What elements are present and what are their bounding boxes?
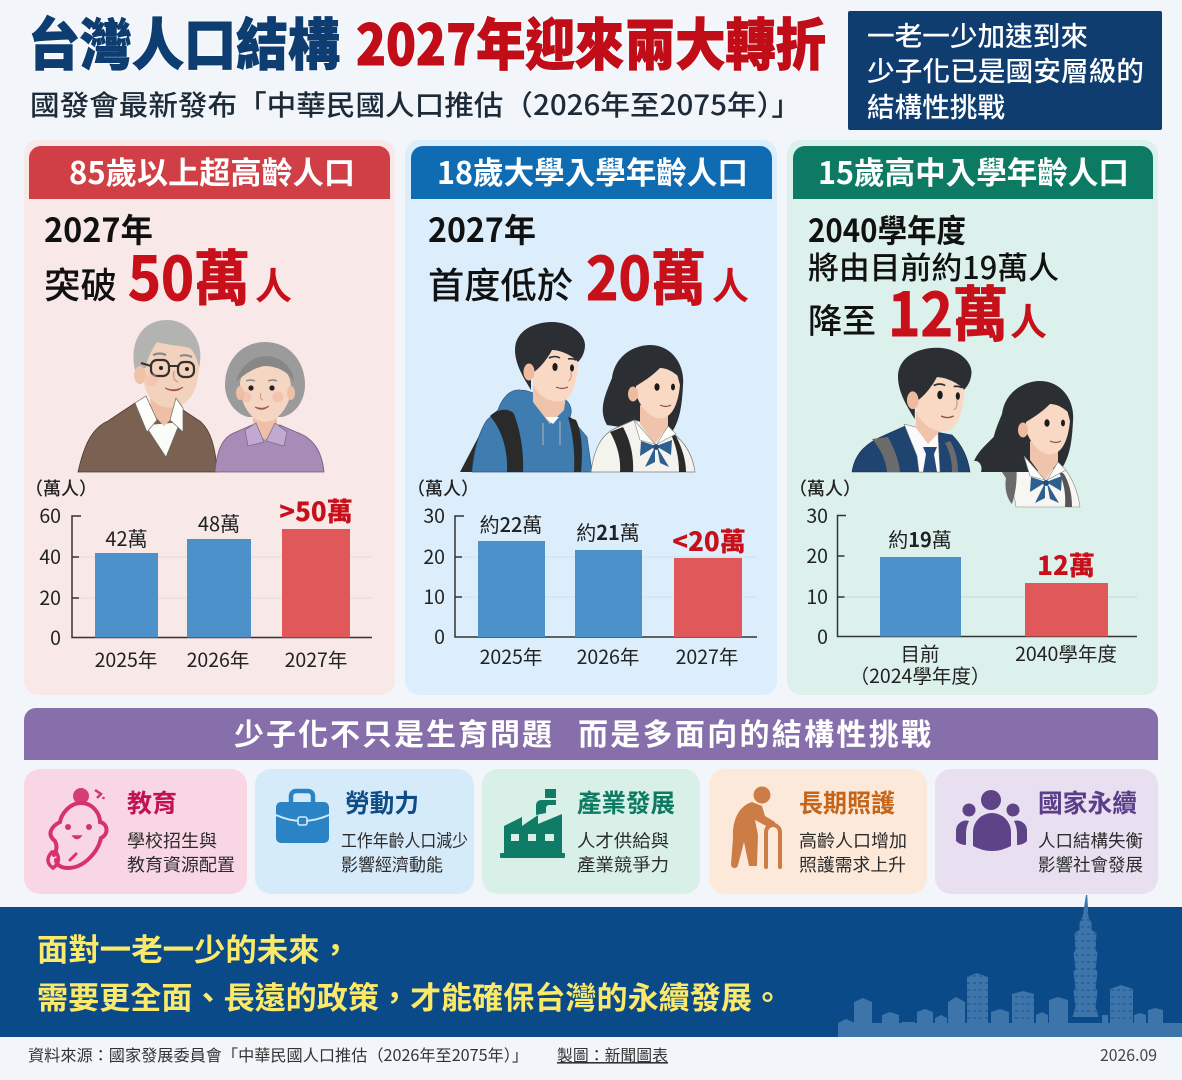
card: 長期照護: [709, 769, 927, 894]
bar chart: 15-year-olds: 12萬: [1037, 546, 1095, 583]
card: 教育: 學校招生與: [127, 828, 217, 853]
card: 國家永續: [935, 769, 1158, 894]
footer date: 2026.09: [1100, 1042, 1157, 1066]
card: 教育: 教育: [127, 784, 177, 820]
bar chart: 85+: [25, 475, 372, 673]
bar chart: 18-year-olds: 10: [423, 581, 445, 610]
headline: 2027年: [44, 204, 153, 252]
bar chart: 15-year-olds: 目前: [900, 638, 940, 667]
bar chart: 18-year-olds: [407, 475, 757, 670]
title: 2027年迎來: [356, 1, 624, 82]
title: 兩大轉折: [625, 1, 826, 82]
callout: top right: 結構性挑戰: [867, 86, 1005, 125]
bar chart: 85+: 40: [39, 541, 61, 570]
headline: [44, 204, 292, 318]
headline: 首度低於: [428, 257, 573, 309]
card: 國家永續: 人口結構失衡: [1038, 828, 1143, 853]
illustration: elderly couple: [78, 320, 324, 472]
panel header: [29, 146, 390, 199]
bar chart: 85+: 2025年: [95, 644, 157, 673]
headline: 2040學年度: [808, 206, 966, 252]
bar chart: 18-year-olds: 2025年: [480, 641, 542, 670]
card: 勞動力: [255, 769, 474, 894]
bar chart: 18-year-olds: 0: [434, 621, 445, 650]
bar chart: 18-year-olds: <20萬: [672, 522, 746, 559]
illustration: high school students: [852, 348, 1080, 507]
banner: 多面向的結構性挑戰: 少子化不只是生育問題: [234, 710, 552, 754]
callout: top right: [848, 11, 1162, 130]
headline: 20萬: [586, 231, 706, 318]
headline: 將由目前約19萬人: [808, 243, 1059, 288]
card: 勞動力: 影響經濟動能: [341, 852, 443, 877]
bar chart: 15-year-olds: （萬人）: [789, 475, 861, 501]
card: 國家永續: 影響社會發展: [1038, 852, 1143, 877]
card: 產業發展: [482, 769, 700, 894]
callout: top right: 一老一少加速到來: [867, 15, 1088, 54]
card: 產業發展: 產業發展: [577, 784, 675, 820]
icon: Taipei skyline: [838, 895, 1182, 1037]
headline: 人: [255, 256, 292, 310]
bar chart: 85+: 2026年: [187, 644, 249, 673]
card: 產業發展: 產業競爭力: [577, 852, 669, 877]
card: 長期照護: 長期照護: [799, 784, 895, 820]
bar chart: 15-year-olds: 約19萬: [888, 524, 952, 553]
bar chart: 18-year-olds: （萬人）: [407, 475, 479, 501]
headline: 人: [712, 256, 749, 310]
footer source: 資料來源：國家發展委員會「中華民國人口推估（2026年至2075年）」: [28, 1042, 528, 1066]
banner: 多面向的結構性挑戰: 而是多面向的結構性挑戰: [578, 710, 931, 754]
icon: factory: [500, 789, 565, 858]
bar chart: 85+: （萬人）: [25, 475, 97, 501]
closing band: 需要更全面、長遠的政策，才能確保台灣的永續發展。: [37, 973, 783, 1018]
bar chart: 15-year-olds: 20: [806, 540, 828, 569]
bar chart: 15-year-olds: 30: [806, 500, 828, 529]
bar chart: 18-year-olds: 約21萬: [576, 517, 640, 546]
bar chart: 18-year-olds: 約22萬: [480, 509, 542, 538]
callout: top right: 少子化已是國安層級的: [867, 50, 1144, 89]
headline: 突破: [44, 257, 117, 309]
headline: 12萬: [888, 267, 1008, 354]
card: 國家永續: 國家永續: [1038, 784, 1137, 820]
panel header: 85歲以上超高齡人口: [69, 148, 355, 193]
panel header: 18歲大學入學年齡人口: [437, 148, 748, 193]
bar chart: 85+: 20: [39, 582, 61, 611]
headline: [428, 204, 749, 318]
bar chart: 85+: 0: [50, 622, 61, 651]
title: [28, 1, 826, 82]
headline: 50萬: [128, 231, 250, 318]
bar chart: 15-year-olds: 0: [817, 621, 828, 650]
bar chart: 85+: 42萬: [105, 523, 148, 552]
bar chart: 85+: 60: [39, 500, 61, 529]
bar chart: 15-year-olds: 2040學年度: [1015, 638, 1117, 667]
panel: 18歲大學入學年齡人口: [405, 140, 777, 695]
card: 教育: 教育資源配置: [127, 852, 235, 877]
panel: 15歲高中入學年齡人口: [787, 140, 1158, 695]
headline: [808, 206, 1059, 354]
card: 產業發展: 人才供給與: [577, 828, 669, 853]
panel: 85歲以上超高齡人口: [24, 140, 395, 695]
card: 教育: [24, 769, 247, 894]
card: 長期照護: 高齡人口增加: [799, 828, 907, 853]
icon: briefcase: [276, 791, 329, 843]
closing band: [0, 895, 1182, 1037]
card: 勞動力: 工作年齡人口減少: [341, 828, 468, 853]
bar chart: 18-year-olds: 30: [423, 500, 445, 529]
icon: people: [956, 790, 1027, 851]
headline: 2027年: [428, 204, 536, 252]
illustration: university students: [460, 322, 695, 472]
subtitle: 國發會最新發布「中華民國人口推估（2026年至2075年）」: [30, 84, 801, 124]
card: 勞動力: 勞動力: [345, 784, 419, 820]
icon: elder with cane: [731, 786, 780, 868]
bar chart: 18-year-olds: 20: [423, 541, 445, 570]
title: 台灣人口結構: [28, 1, 340, 82]
bar chart: 15-year-olds: 10: [806, 581, 828, 610]
closing band: 面對一老一少的未來，: [37, 925, 351, 970]
headline: 人: [1010, 292, 1047, 346]
footer credit: 製圖：新聞圖表: [557, 1042, 668, 1066]
bar chart: 85+: 2027年: [285, 644, 347, 673]
bar chart: 15-year-olds: [789, 475, 1137, 689]
bar chart: 18-year-olds: 2027年: [676, 641, 738, 670]
bar chart: 15-year-olds: （2024學年度）: [850, 660, 990, 689]
bar chart: 85+: 48萬: [198, 508, 240, 537]
bar chart: 18-year-olds: 2026年: [577, 641, 639, 670]
panel header: 15歲高中入學年齡人口: [818, 148, 1129, 193]
headline: 降至: [808, 294, 876, 343]
banner: 多面向的結構性挑戰: [24, 708, 1158, 760]
bar chart: 85+: >50萬: [279, 492, 353, 529]
icon: baby: [48, 788, 107, 868]
card: 長期照護: 照護需求上升: [799, 852, 906, 877]
